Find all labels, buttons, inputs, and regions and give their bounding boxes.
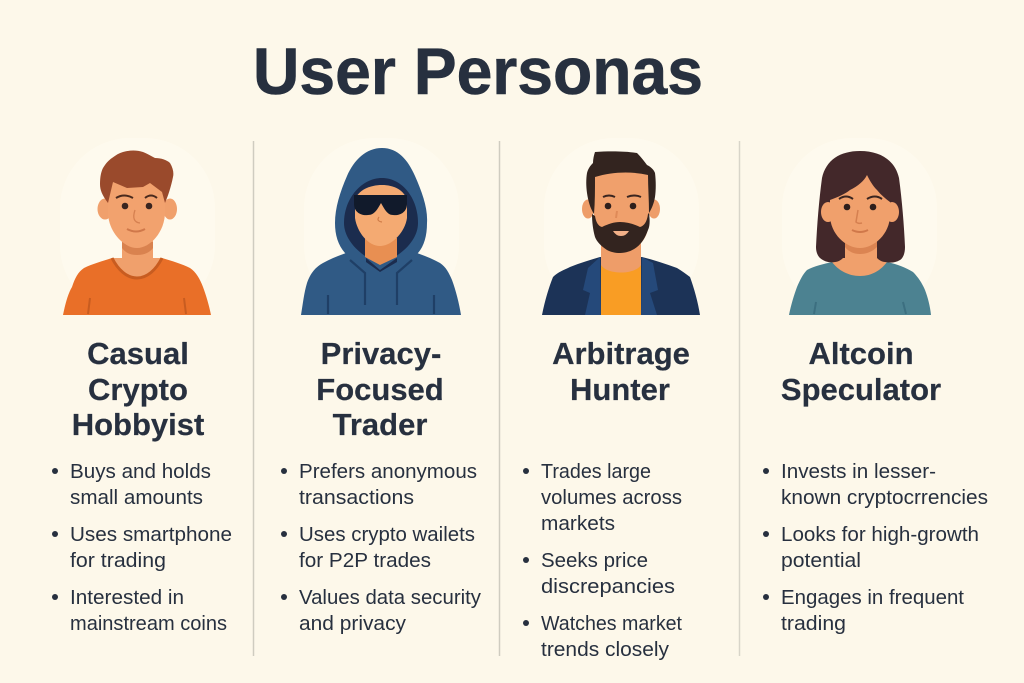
name	[72, 336, 204, 442]
panel: privacy-focused trader	[281, 148, 481, 635]
icon: young man in orange t-shirt	[63, 150, 211, 315]
bullet list: Uses smartphone	[70, 524, 232, 546]
bullet list: for trading	[70, 550, 166, 572]
bullet list: trends closely	[541, 639, 669, 661]
bullet list: Invests in lesser-	[781, 461, 936, 483]
title: User Personas	[253, 34, 703, 108]
name: Hunter	[570, 372, 670, 407]
name	[552, 336, 690, 407]
panel: altcoin speculator	[763, 151, 988, 635]
bullet list: trading	[781, 613, 846, 635]
name: Crypto	[88, 372, 188, 407]
bullet list	[281, 461, 481, 635]
bullet list: Seeks price	[541, 550, 648, 572]
bullet list	[763, 461, 988, 635]
bullet list: Values data security	[299, 587, 481, 609]
name	[316, 336, 444, 442]
name: Focused	[316, 372, 444, 407]
bullet list: for P2P trades	[299, 550, 431, 572]
icon: bearded man in navy blazer	[542, 151, 700, 315]
bullet list: small amounts	[70, 487, 203, 509]
name: Hobbyist	[72, 407, 204, 442]
name: Arbitrage	[552, 336, 690, 371]
bullet list	[52, 461, 232, 635]
icon: woman with shoulder-length hair in teal top	[789, 151, 931, 315]
bullet list: markets	[541, 513, 615, 535]
name	[781, 336, 941, 407]
name: Privacy-	[321, 336, 441, 371]
bullet list: Trades large	[541, 461, 651, 483]
bullet list: Looks for high-growth	[781, 524, 979, 546]
icon: hooded figure in sunglasses	[301, 148, 461, 315]
bullet list: Buys and holds	[70, 461, 211, 483]
bullet list: volumes across	[541, 487, 682, 509]
name: Altcoin	[808, 336, 914, 371]
bullet list: Engages in frequent	[781, 587, 964, 609]
bullet list: transactions	[299, 487, 414, 509]
bullet list: Interested in	[70, 587, 184, 609]
bullet list: Prefers anonymous	[299, 461, 477, 483]
bullet list: discrepancies	[541, 576, 675, 598]
name: Casual	[87, 336, 189, 371]
bullet list: and privacy	[299, 613, 406, 635]
bullet list: potential	[781, 550, 861, 572]
bullet list: mainstream coins	[70, 613, 227, 635]
name: Speculator	[781, 372, 941, 407]
bullet list	[523, 461, 682, 661]
name: Trader	[333, 407, 427, 442]
bullet list: Watches market	[541, 613, 682, 635]
panel: casual crypto hobbyist	[52, 150, 232, 635]
panel: arbitrage hunter	[523, 151, 700, 661]
bullet list: Uses crypto wailets	[299, 524, 475, 546]
bullet list: known cryptocrrencies	[781, 487, 988, 509]
